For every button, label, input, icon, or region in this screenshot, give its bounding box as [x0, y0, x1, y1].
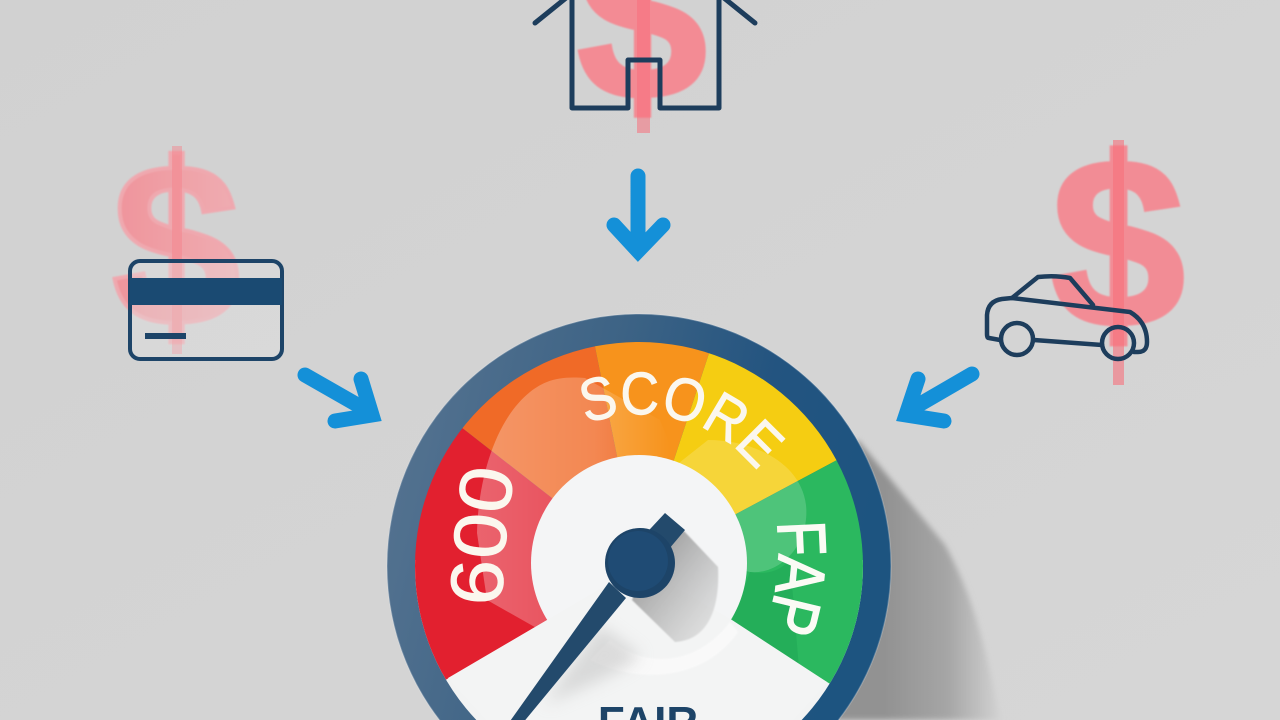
arrow: down from house: [614, 176, 663, 251]
segment: orange: [595, 342, 709, 461]
segment: yellow: [674, 353, 836, 514]
segment: green: [731, 460, 863, 684]
gauge face: [415, 342, 863, 720]
needle shadow: [632, 530, 718, 642]
dollar sign behind car: $: [1051, 109, 1185, 377]
highlight: left sheen: [477, 378, 656, 627]
credit score gauge: [387, 314, 892, 720]
icon: house with dollar sign: [535, 0, 755, 148]
gauge needle: [508, 513, 685, 720]
segment: dark orange: [462, 346, 618, 498]
card stripe: [130, 278, 282, 305]
segment: red: [415, 428, 552, 680]
arrow: from car to gauge: [906, 374, 972, 421]
needle ground shadow: [545, 625, 640, 705]
dial lower crescent: [590, 622, 738, 675]
gauge outer ring: [387, 314, 891, 720]
label: 600: 600: [450, 469, 512, 602]
icon: car with dollar sign: [987, 109, 1185, 385]
icon: credit card with dollar sign: [111, 116, 282, 375]
needle hub: [605, 528, 675, 598]
dark green lower shade: [732, 564, 798, 663]
card signature line: [145, 333, 186, 339]
dollar sign behind card: $: [111, 116, 241, 375]
gauge inner white dial: [531, 455, 747, 671]
arrow: from card to gauge: [305, 375, 372, 421]
gauge cast shadow: [700, 440, 1000, 720]
white lower sector: [400, 560, 880, 720]
label: SCORE: SCORE: [581, 372, 786, 470]
car outline: [987, 276, 1147, 359]
house outline: [535, 0, 755, 108]
label: FAP: FAP: [772, 524, 826, 634]
white sector patch: [448, 566, 827, 720]
highlight: right sheen: [670, 440, 806, 572]
card outline: [130, 261, 282, 359]
